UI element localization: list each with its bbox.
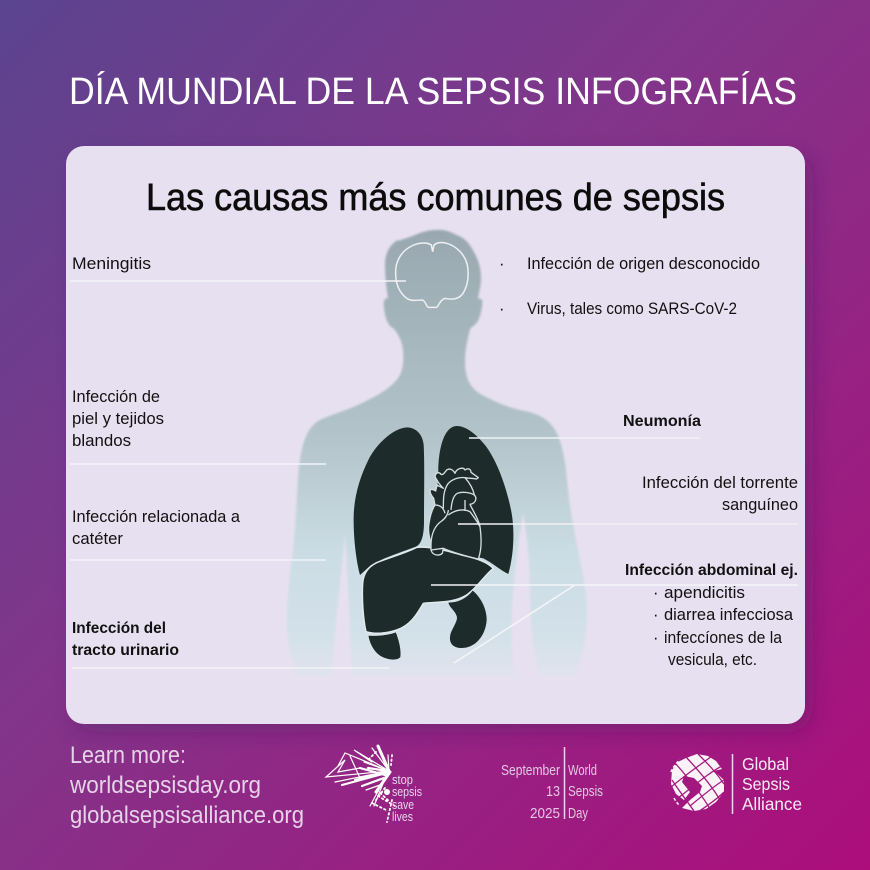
callout: skin and soft tissue: piel y tejidos: [72, 410, 164, 428]
logo: world sepsis day date: 2025: [530, 806, 560, 822]
liver: [362, 547, 493, 633]
callout: virus: ·: [499, 300, 504, 318]
logo: stop sepsis save lives: sepsis: [392, 785, 422, 799]
footer: learn more: Learn more:: [70, 742, 186, 769]
callout: abdominal: infeccíones de la: [664, 629, 783, 647]
callout: bloodstream: [458, 474, 798, 524]
callout: pneumonia: Neumonía: [623, 413, 701, 430]
callout: abdominal: ·: [653, 629, 658, 647]
panel: causes: [66, 146, 805, 724]
right lung: [428, 426, 513, 574]
logo: world sepsis day date: Sepsis: [568, 784, 603, 800]
callout: abdominal: [431, 562, 798, 669]
callout: abdominal: vesicula, etc.: [668, 651, 757, 669]
callout: catheter: [70, 508, 326, 560]
logo: world sepsis day date: September: [501, 763, 560, 779]
callout: catheter: Infección relacionada a: [72, 508, 241, 526]
icon: globe: [670, 754, 724, 812]
kidney / bladder: [368, 632, 401, 660]
callout: urinary tract: Infección del: [72, 620, 166, 637]
logo: stop sepsis save lives: lives: [392, 810, 413, 824]
footer: learn more: [69, 742, 304, 829]
callout: virus: Virus, tales como SARS-CoV-2: [527, 300, 737, 318]
logo: stop sepsis save lives: save: [392, 798, 414, 812]
title: DÍA MUNDIAL DE LA SEPSIS INFOGRAFÍAS: [69, 70, 797, 113]
callout: abdominal: diarrea infecciosa: [664, 606, 794, 624]
logo: world sepsis day date: World: [568, 763, 597, 779]
logo: global sepsis alliance: Alliance: [742, 794, 802, 814]
callout: meningitis: Meningitis: [72, 255, 151, 273]
callout: urinary tract: tracto urinario: [72, 642, 179, 659]
callout: bloodstream: sanguíneo: [722, 496, 798, 514]
icon: splatter: [326, 746, 395, 822]
callout: urinary tract: [72, 620, 390, 668]
logo: global sepsis alliance: Sepsis: [742, 774, 790, 794]
callout: abdominal: Infección abdominal ej.: [625, 562, 798, 579]
callout: unknown origin: Infección de origen desconocido: [527, 255, 760, 273]
body silhouette: [287, 230, 587, 677]
callout: skin and soft tissue: Infección de: [72, 388, 160, 406]
left lung: [354, 427, 424, 575]
callout: catheter: catéter: [72, 530, 124, 548]
stomach: [448, 591, 487, 648]
logo: global sepsis alliance: Global: [742, 754, 789, 774]
logo: stop sepsis save lives: stop: [392, 773, 413, 787]
footer: learn more: globalsepsisalliance.org: [70, 802, 304, 829]
callout: abdominal: ·: [653, 584, 658, 602]
icon: heart: [428, 468, 481, 559]
logo: world sepsis day date: Day: [568, 806, 589, 822]
logo: global sepsis alliance: [670, 754, 802, 814]
organs: [354, 426, 513, 660]
logo: world sepsis day date: 13: [546, 784, 560, 800]
callout: abdominal: ·: [653, 606, 658, 624]
heading: Las causas más comunes de sepsis: [146, 177, 725, 219]
icon: brain outline: [396, 243, 468, 307]
callout: unknown origin: ·: [499, 255, 504, 273]
callout: skin and soft tissue: [70, 388, 326, 464]
callout: abdominal: apendicitis: [664, 584, 745, 602]
callout: skin and soft tissue: blandos: [72, 432, 131, 450]
footer: learn more: worldsepsisday.org: [69, 772, 261, 799]
callout: bloodstream: Infección del torrente: [642, 474, 798, 492]
logo: world sepsis day date: [501, 747, 603, 822]
logo: stop sepsis save lives: [326, 746, 422, 824]
